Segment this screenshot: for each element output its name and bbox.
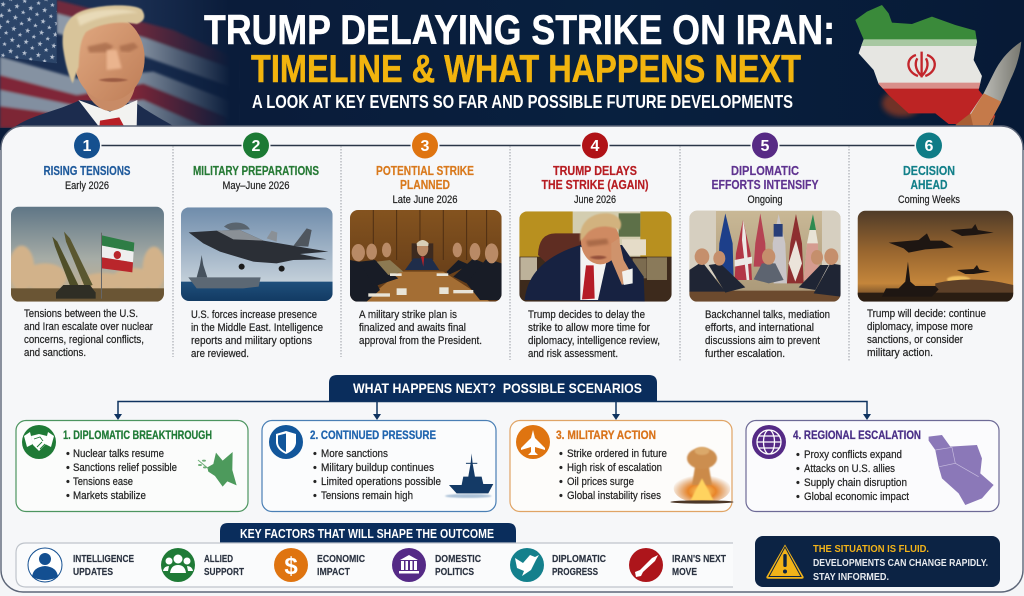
panel: scenario 1 diplomatic breakthrough: 1. DIPLOMATIC BREAKTHROUGH — [63, 428, 212, 442]
icon: Iran flag map and missile — [856, 5, 1022, 126]
title: TRUMP DELAYING STRIKE ON IRAN: — [204, 6, 835, 53]
panel: scenario 4 regional escalation: Proxy conflicts expand — [804, 449, 902, 461]
factor: diplomatic progress — [510, 548, 606, 582]
panel: scenario 1 diplomatic breakthrough — [16, 420, 248, 512]
heading: what happens next — [329, 375, 657, 401]
step 4: Trump delays the strike: TRUMP DELAYS — [553, 164, 637, 178]
step 2: military preparations: MILITARY PREPARATIONS — [193, 164, 319, 178]
portrait: Trump — [13, 5, 177, 128]
text: step 6 description: sanctions, or consider — [867, 334, 963, 346]
text: step 6 description: diplomacy, impose more — [867, 321, 973, 333]
step 3: potential strike planned: POTENTIAL STRIKE — [376, 164, 474, 178]
panel: key factors row — [16, 543, 733, 587]
timeline line — [100, 146, 916, 362]
text: step 2 description: U.S. forces increase presence — [191, 309, 317, 321]
panel: scenario 2 continued pressure: Limited operations possible — [321, 476, 441, 488]
panel: scenario 3 military action: High risk of escalation — [567, 462, 662, 474]
title — [204, 6, 835, 112]
panel: scenario 4 regional escalation: Attacks on U.S. allies — [804, 463, 895, 475]
step 5: diplomatic efforts intensify: 5 — [761, 138, 770, 155]
text: step 1 description: and sanctions. — [24, 347, 86, 359]
panel: main card — [1, 126, 1023, 592]
step 6: decision ahead: AHEAD — [910, 178, 948, 192]
icon: region map — [929, 435, 994, 505]
factor: intelligence updates: UPDATES — [73, 567, 113, 578]
panel: scenario 3 military action: Global instability rises — [567, 490, 661, 502]
step 4: Trump delays the strike: 4 — [591, 138, 600, 155]
text: step 5 description: discussions aim to prevent — [705, 335, 820, 347]
step 6: decision ahead: 6 — [925, 138, 934, 155]
header banner — [0, 0, 1024, 150]
text: step 2 description — [191, 309, 323, 360]
arrows: connectors to scenarios — [114, 401, 871, 420]
icon: jet — [516, 425, 550, 459]
factor: diplomatic progress: PROGRESS — [552, 567, 598, 578]
icon: shield — [269, 425, 303, 459]
text: step 2 description: are reviewed. — [191, 348, 249, 360]
icon: warship — [445, 453, 493, 498]
panel: scenario 1 diplomatic breakthrough: Tensions ease — [73, 476, 133, 488]
step 3: potential strike planned: Late June 2026 — [392, 194, 458, 206]
title: A LOOK AT KEY EVENTS SO FAR AND POSSIBLE FUTURE DEVELOPMENTS — [252, 91, 793, 112]
callout: situation is fluid: THE SITUATION IS FLUID. — [813, 543, 929, 555]
step 2: military preparations — [193, 132, 319, 192]
background: American flag — [0, 0, 240, 128]
text: step 4 description: strike to allow more time for — [528, 322, 650, 334]
text: step 6 description: Trump will decide: continue — [867, 308, 986, 320]
panel: scenario 3 military action: • — [559, 448, 563, 460]
icon: dove — [198, 452, 237, 487]
factor: domestic politics: POLITICS — [435, 567, 474, 578]
panel: scenario 2 continued pressure: 2. CONTINUED PRESSURE — [310, 428, 436, 442]
callout: situation is fluid: STAY INFORMED. — [813, 571, 889, 583]
panel: scenario 2 continued pressure: Tensions remain high — [321, 490, 413, 502]
panel: scenario 2 continued pressure: • — [313, 490, 317, 502]
panel: scenario 2 continued pressure: • — [313, 448, 317, 460]
factor: Iran's next move: MOVE — [672, 567, 697, 578]
text: step 1 description — [24, 308, 153, 359]
step 1: rising tensions: Early 2026 — [65, 180, 109, 192]
step 6: decision ahead: DECISION — [903, 164, 955, 178]
panel: scenario 4 regional escalation: • — [796, 491, 800, 503]
step 5: diplomatic efforts intensify: DIPLOMATIC — [731, 164, 799, 178]
panel: scenario 4 regional escalation: 4. REGIONAL ESCALATION — [793, 428, 921, 442]
panel: scenario 3 military action — [510, 420, 734, 512]
text: step 4 description: diplomacy, intelligence review, — [528, 335, 660, 347]
text: step 3 description — [359, 309, 482, 347]
factor: economic impact: IMPACT — [317, 567, 350, 578]
panel: scenario 4 regional escalation: Supply chain disruption — [804, 477, 907, 489]
icon: warning triangle — [766, 544, 804, 579]
panel: scenario 1 diplomatic breakthrough: Sanctions relief possible — [73, 462, 177, 474]
title: TIMELINE & WHAT HAPPENS NEXT — [251, 48, 801, 91]
photo: fighter jet over carrier — [181, 207, 333, 302]
panel: scenario 2 continued pressure: • — [313, 476, 317, 488]
step 2: military preparations: May–June 2026 — [222, 180, 290, 192]
heading: key factors — [220, 523, 516, 543]
factor: economic impact: $ — [284, 553, 298, 580]
panel: scenario 3 military action: Oil prices surge — [567, 476, 634, 488]
text: step 5 description: further escalation. — [705, 348, 785, 360]
icon: explosion — [670, 447, 734, 504]
panel: scenario 1 diplomatic breakthrough: • — [66, 462, 70, 474]
text: step 3 description: finalized and awaits final — [359, 322, 466, 334]
text: step 1 description: concerns, regional conflicts, — [24, 334, 144, 346]
panel: scenario 3 military action: 3. MILITARY ACTION — [556, 428, 656, 442]
step 1: rising tensions — [44, 132, 130, 192]
callout: situation is fluid — [755, 536, 1000, 587]
text: step 6 description: military action. — [867, 347, 933, 359]
panel: scenario 4 regional escalation: • — [796, 449, 800, 461]
panel: scenario 4 regional escalation: • — [796, 477, 800, 489]
panel: scenario 1 diplomatic breakthrough: Nuclear talks resume — [73, 448, 164, 460]
photo: diplomats and flags — [689, 211, 841, 302]
panel: scenario 3 military action: • — [559, 462, 563, 474]
step 5: diplomatic efforts intensify — [712, 132, 819, 206]
factor: domestic politics — [392, 548, 481, 582]
panel: scenario 2 continued pressure: More sanctions — [321, 448, 388, 460]
panel: scenario 4 regional escalation — [746, 420, 999, 512]
text: step 4 description: and risk assessment. — [528, 348, 618, 360]
factor: domestic politics: DOMESTIC — [435, 554, 481, 565]
factor: Iran's next move — [629, 548, 726, 582]
panel: scenario 4 regional escalation: • — [796, 463, 800, 475]
factor: Iran's next move: IRAN'S NEXT — [672, 554, 726, 565]
factor: diplomatic progress: DIPLOMATIC — [552, 554, 606, 565]
step 3: potential strike planned: 3 — [421, 138, 430, 155]
step 4: Trump delays the strike — [542, 132, 648, 206]
text: step 4 description — [528, 309, 660, 360]
text: step 5 description: Backchannel talks, mediation — [705, 309, 830, 321]
factor: economic impact: ECONOMIC — [317, 554, 365, 565]
photo: war room meeting — [350, 210, 502, 302]
factor: intelligence updates — [28, 548, 134, 582]
factor: economic impact — [274, 548, 365, 582]
panel: scenario 3 military action: • — [559, 490, 563, 502]
step 1: rising tensions: 1 — [83, 138, 92, 155]
panel: scenario 1 diplomatic breakthrough: • — [66, 448, 70, 460]
text: step 5 description — [705, 309, 830, 360]
photo: Trump at desk — [519, 211, 672, 302]
heading: key factors: KEY FACTORS THAT WILL SHAPE THE OUTCOME — [240, 527, 494, 541]
step 6: decision ahead: Coming Weeks — [898, 194, 961, 206]
text: step 2 description: reports and military options — [191, 335, 312, 347]
text: step 4 description: Trump decides to delay the — [528, 309, 645, 321]
factor: intelligence updates: INTELLIGENCE — [73, 554, 134, 565]
factor: allied support — [161, 548, 244, 582]
step 4: Trump delays the strike: THE STRIKE (AGAIN) — [542, 178, 648, 192]
panel: scenario 1 diplomatic breakthrough: Markets stabilize — [73, 490, 146, 502]
heading: what happens next: WHAT HAPPENS NEXT? POSSIBLE SCENARIOS — [353, 380, 642, 396]
text: step 6 description — [867, 308, 986, 359]
step 4: Trump delays the strike: June 2026 — [574, 194, 616, 206]
text: step 1 description: Tensions between the U.S. — [24, 308, 138, 320]
panel: scenario 3 military action: • — [559, 476, 563, 488]
panel: scenario 1 diplomatic breakthrough: • — [66, 490, 70, 502]
panel: scenario 2 continued pressure: • — [313, 462, 317, 474]
step 5: diplomatic efforts intensify: EFFORTS INTENSIFY — [712, 178, 819, 192]
text: step 3 description: approval from the President. — [359, 335, 482, 347]
step 2: military preparations: 2 — [252, 138, 261, 155]
photo: missiles and Iranian flag — [9, 207, 165, 302]
step 6: decision ahead — [898, 132, 961, 206]
panel: scenario 4 regional escalation: Global economic impact — [804, 491, 909, 503]
icon: handshake — [22, 425, 56, 459]
icon: globe — [752, 425, 786, 459]
factor: allied support: ALLIED — [204, 554, 233, 565]
panel: scenario 1 diplomatic breakthrough: • — [66, 476, 70, 488]
factor: allied support: SUPPORT — [204, 567, 244, 578]
panel: scenario 3 military action: Strike ordered in future — [567, 448, 667, 460]
panel: scenario 2 continued pressure — [262, 420, 496, 512]
step 5: diplomatic efforts intensify: Ongoing — [748, 194, 782, 206]
text: step 2 description: in the Middle East. Intelligence — [191, 322, 323, 334]
step 3: potential strike planned — [376, 132, 474, 206]
photo: jets at sunset — [858, 211, 1013, 302]
step 3: potential strike planned: PLANNED — [400, 178, 450, 192]
callout: situation is fluid: DEVELOPMENTS CAN CHANGE RAPIDLY. — [813, 557, 988, 569]
text: step 5 description: efforts, and international — [705, 322, 814, 334]
step 1: rising tensions: RISING TENSIONS — [44, 164, 130, 178]
text: step 3 description: A military strike plan is — [359, 309, 457, 321]
panel: scenario 2 continued pressure: Military buildup continues — [321, 462, 434, 474]
text: step 1 description: and Iran escalate over nuclear — [24, 321, 153, 333]
